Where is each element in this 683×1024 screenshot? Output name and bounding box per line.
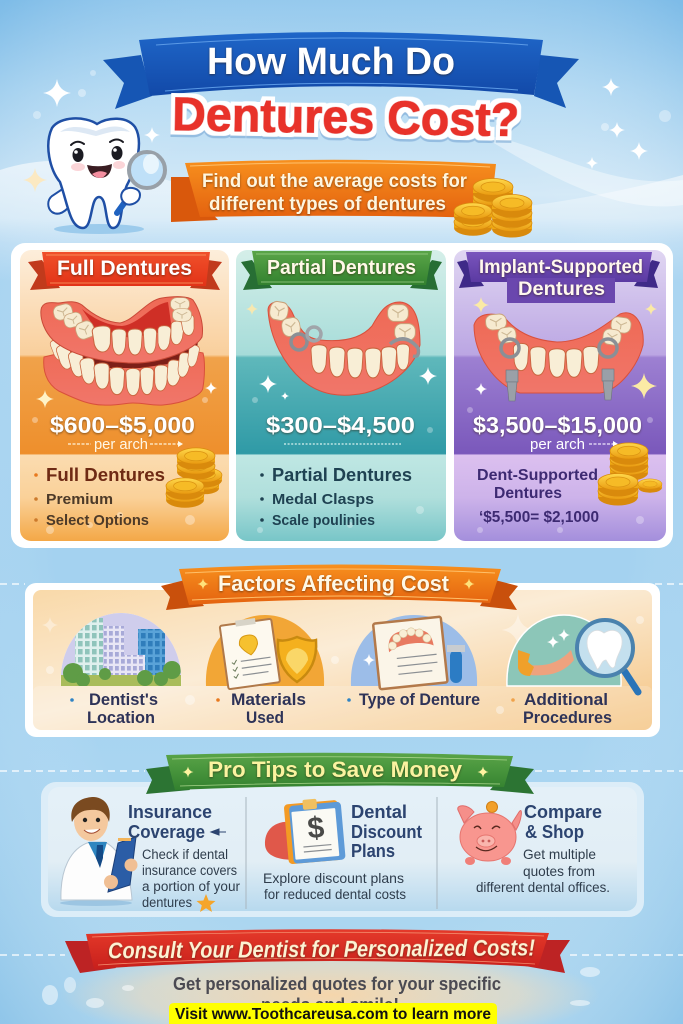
list: full dentures: Select Options [46,512,149,529]
panel: implant-supported dentures [454,250,666,541]
tip text: discount plans [263,870,406,902]
price: partial dentures: $300–$4,500 [266,412,415,438]
list: full dentures: Premium [46,491,113,508]
factor icon: materials [206,615,324,689]
factor label: type of denture: Type of Denture [359,690,480,709]
tip text: insurance [142,847,241,910]
tip: dental discount plans [263,797,422,902]
list: partial dentures: Medal Clasps [272,491,374,508]
icon: discount plan document: $ [306,811,326,845]
ribbon: pro tips: Pro Tips to Save Money [208,757,463,782]
icon: coins full dentures [166,448,222,508]
factor icon: type of denture [351,615,477,689]
icon: piggy bank [458,802,521,865]
list: partial dentures [260,465,412,529]
ribbon: pro tips [146,753,534,794]
icon: discount plan document [265,797,346,864]
tip heading: insurance: Insurance [128,802,212,822]
tip: insurance coverage [60,797,241,912]
factor label: additional procedures [511,690,612,727]
tip text: compare: different dental offices. [476,879,610,895]
ribbon: full dentures: Full Dentures [57,257,192,280]
tip text: compare [476,846,610,895]
icon: dentist [60,797,138,906]
tip heading: discount plans: Discount [351,822,422,842]
ribbon: implant-supported dentures [457,252,660,303]
list: implant dentures [477,467,599,526]
list: partial dentures: Scale poulinies [272,512,375,529]
panel: full dentures [20,250,229,541]
tip heading: compare [524,802,602,842]
ribbon: full dentures [28,252,222,290]
ribbon: factors affecting cost: Factors Affecting Cost [218,571,450,596]
ribbon: consult your dentist [65,929,570,973]
closing text: needs and smile! [261,995,399,1015]
factor icon: additional procedures [507,615,638,692]
tip heading: compare: & Shop [525,822,584,842]
subtitle text [202,171,468,215]
list: implant dentures: Dentures [494,485,562,502]
list: partial dentures: Partial Dentures [272,465,412,485]
factor icon: location [61,613,181,687]
subtitle ribbon [171,160,496,222]
tip heading: discount plans: Plans [351,841,395,861]
panel: denture types [11,243,673,548]
tip heading: insurance [128,802,226,842]
subtitle text: Find out the average costs for [202,171,468,192]
factor label: location: Location [87,708,155,727]
factor label: location: Dentist's [89,690,158,709]
panel: pro tips [41,782,644,917]
note: per arch implant [530,437,618,453]
note: per arch implant: per arch [530,437,585,453]
closing text [173,974,501,1015]
price: implant dentures: $3,500–$15,000 [473,412,642,438]
ribbon: partial dentures [241,251,442,290]
footer link bar: Visit www.Toothcareusa.com to learn more [175,1006,491,1023]
icons: background sparkles [23,78,648,192]
note: per arch: per arch [94,437,148,453]
icon: coins implant dentures [598,443,662,506]
factor label: additional procedures: Procedures [523,708,612,727]
illustration: full dentures [36,297,217,408]
list: full dentures [34,465,165,529]
subtitle text: different types of dentures [209,194,446,215]
panel: factors affecting cost [25,583,660,737]
icon: star [196,894,216,912]
ribbon: factors affecting cost [161,564,518,610]
tip text: compare: quotes from [523,863,595,879]
panel: partial dentures [236,250,446,541]
title line one: How Much Do [207,41,455,83]
tip text: discount plans: for reduced dental costs [264,886,406,902]
factor label: additional procedures: Additional [524,690,608,709]
tip text: insurance: insurance covers [142,863,237,878]
factor label: materials: Used [246,708,284,727]
factor label: location [70,690,158,727]
list: implant dentures: Dent-Supported [477,467,598,484]
factor label: materials [216,690,306,727]
illustration: partial dentures [246,300,437,400]
tip heading: discount plans [351,802,422,861]
ribbon: partial dentures: Partial Dentures [267,257,416,279]
list: implant dentures: ‘$5,500= $2,1000 [479,509,599,526]
ribbon: implant-supported dentures: Dentures [518,279,605,300]
tip heading: discount plans: Dental [351,802,407,822]
closing text: Get personalized quotes for your specific [173,974,501,994]
tip heading: compare: Compare [524,802,602,822]
price: full dentures: $600–$5,000 [50,412,195,438]
factor label: materials: Materials [231,690,306,709]
ribbon: implant-supported dentures: Implant-Supported [479,257,643,278]
list: full dentures: Full Dentures [46,465,165,485]
tip text: insurance: Check if dental [142,847,228,862]
ribbon: consult your dentist: Consult Your Dentist for Personalized Costs! [108,934,535,963]
tip text: insurance: a portion of your [142,879,241,894]
icon: coin stacks [454,178,532,238]
note: per arch [68,437,183,453]
tip: compare and shop [458,802,610,895]
tip text: discount plans: Explore discount plans [263,870,404,886]
tip text: compare: Get multiple [523,846,596,862]
mascot: tooth with magnifier [48,118,165,234]
title banner [103,32,579,109]
illustration: implant dentures [473,297,657,401]
tip heading: insurance: Coverage [128,822,205,842]
title line two: Dentures Cost? [172,87,520,146]
tip text: insurance: dentures [142,895,192,910]
